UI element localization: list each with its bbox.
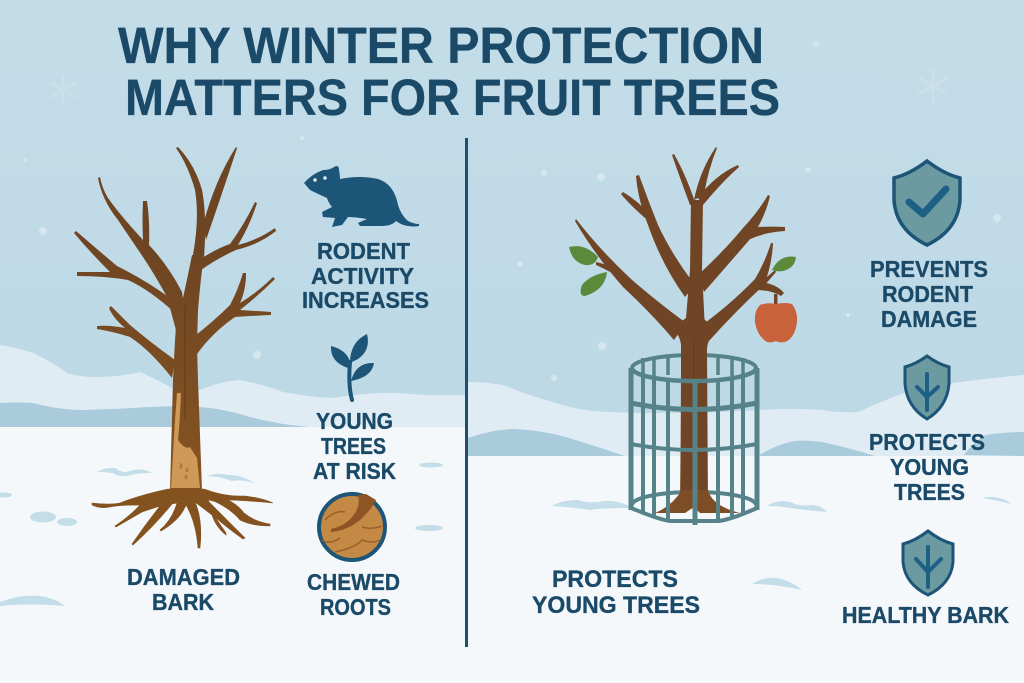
decorative snowflakes and dots bbox=[23, 41, 1001, 381]
label: healthy bark: HEALTHY BARK bbox=[842, 602, 1009, 628]
label: rodent activity increases: RODENT bbox=[317, 238, 410, 264]
tree root flare bbox=[655, 490, 740, 513]
icon: shield healthy bark bbox=[903, 531, 953, 595]
title: MATTERS FOR FRUIT TREES bbox=[125, 69, 780, 126]
label: protects young trees (main): PROTECTS bbox=[552, 566, 678, 593]
cage back bbox=[632, 355, 756, 505]
label: rodent activity increases: INCREASES bbox=[302, 287, 429, 313]
title bbox=[118, 17, 780, 126]
roots bbox=[92, 489, 273, 548]
icon: shield with sprout bbox=[905, 356, 949, 419]
label: protects young trees (main): YOUNG TREES bbox=[532, 592, 700, 619]
icon: sapling bbox=[331, 334, 374, 400]
snow drifts bbox=[0, 462, 1012, 606]
label: damaged bark: BARK bbox=[152, 589, 214, 615]
label: rodent activity increases bbox=[302, 238, 429, 313]
label: protects young trees bbox=[869, 429, 985, 505]
left snowy hills bbox=[0, 345, 466, 427]
label: rodent activity increases: ACTIVITY bbox=[311, 263, 414, 289]
label: protects young trees: YOUNG bbox=[890, 454, 969, 480]
label: protects young trees: TREES bbox=[894, 479, 965, 505]
exposed damaged bark bbox=[171, 393, 200, 488]
label: prevents rodent damage bbox=[870, 256, 988, 332]
label: prevents rodent damage: DAMAGE bbox=[881, 306, 977, 332]
label: damaged bark: DAMAGED bbox=[127, 564, 240, 590]
label: protects young trees (main) bbox=[532, 566, 700, 619]
icon: chewed roots bbox=[319, 494, 385, 560]
icon: rodent bbox=[304, 166, 419, 227]
illustration: damaged tree bbox=[74, 147, 276, 548]
label: prevents rodent damage: RODENT bbox=[882, 281, 973, 307]
right snowy hills bbox=[468, 375, 1024, 456]
label: young trees at risk: TREES bbox=[321, 433, 386, 459]
label: chewed roots: ROOTS bbox=[320, 594, 391, 620]
tree crown and trunk bbox=[575, 147, 785, 505]
illustration: protected tree with cage bbox=[569, 147, 797, 525]
title: WHY WINTER PROTECTION bbox=[118, 17, 764, 74]
tree branches and trunk bbox=[74, 147, 276, 490]
leaves bbox=[569, 246, 796, 296]
label: chewed roots: CHEWED bbox=[307, 569, 400, 595]
snow ground bbox=[0, 427, 1024, 683]
label: prevents rodent damage: PREVENTS bbox=[870, 256, 988, 282]
apple bbox=[755, 294, 797, 342]
label: protects young trees: PROTECTS bbox=[869, 429, 985, 455]
label: chewed roots bbox=[307, 569, 400, 620]
label: damaged bark bbox=[127, 564, 240, 615]
label: young trees at risk bbox=[313, 408, 396, 484]
label: young trees at risk: YOUNG bbox=[316, 408, 393, 434]
label: young trees at risk: AT RISK bbox=[313, 458, 396, 484]
divider bbox=[465, 138, 468, 647]
icon: shield with check bbox=[894, 161, 960, 245]
cage front bbox=[631, 368, 757, 525]
